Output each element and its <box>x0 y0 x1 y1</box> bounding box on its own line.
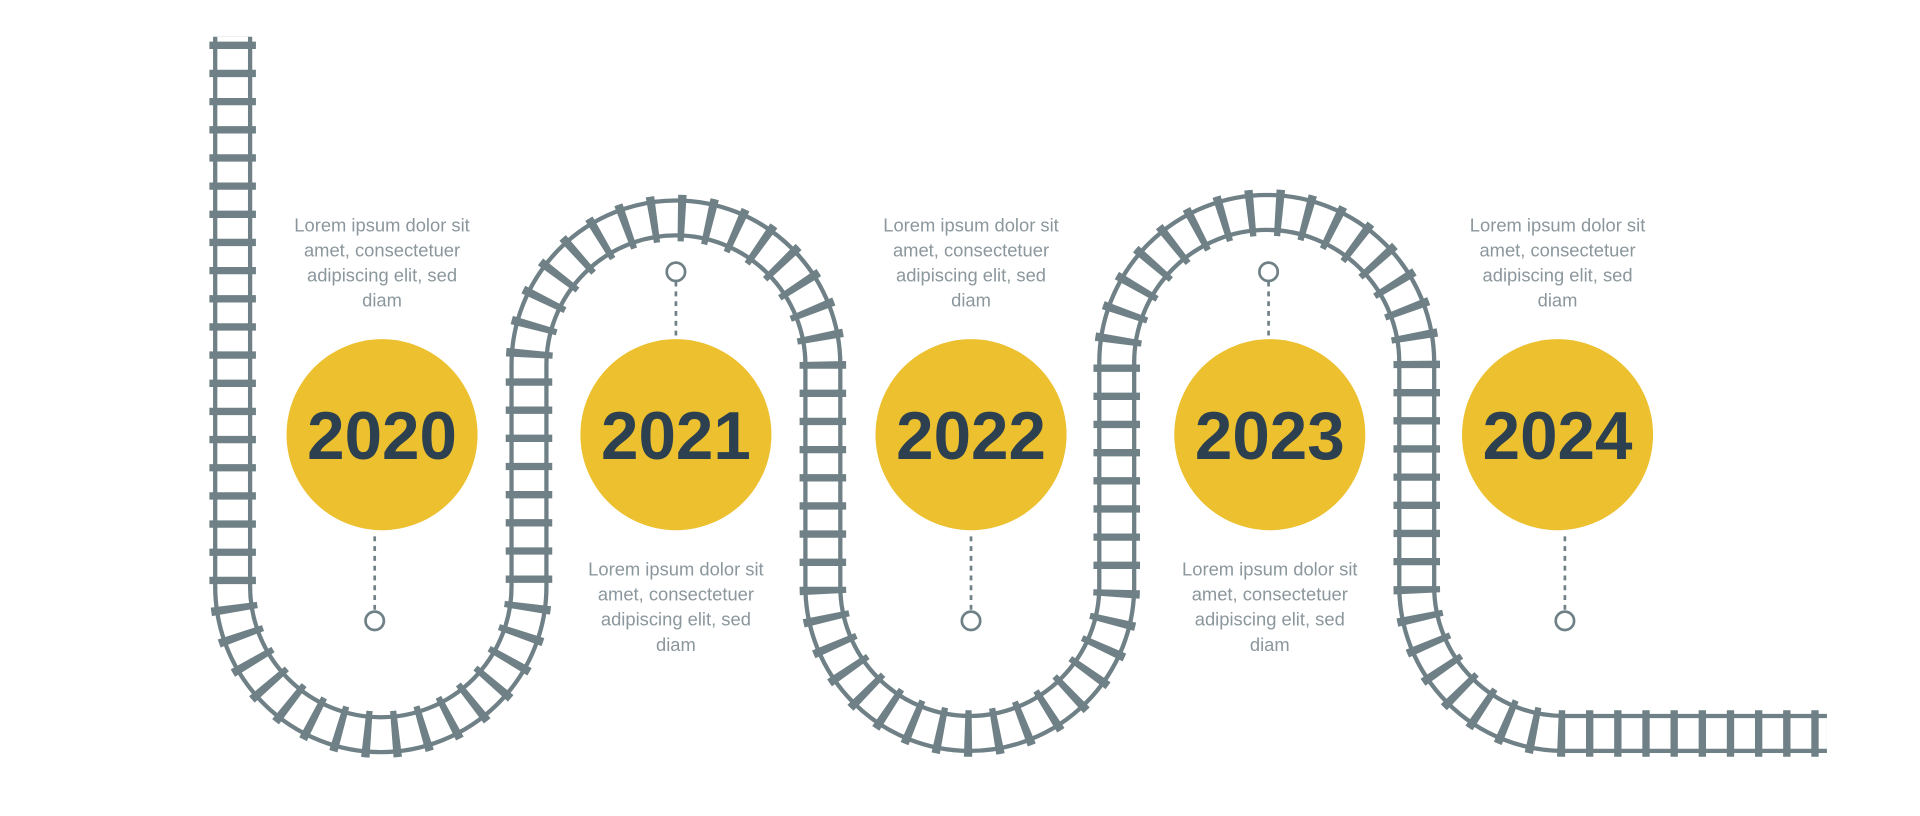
circle: 2021 <box>580 339 771 530</box>
text: 2024 description: diam <box>1538 290 1577 311</box>
text: 2021 description: adipiscing elit, sed <box>601 609 751 630</box>
circle: 2023 <box>1174 339 1365 530</box>
text: 2020 description: amet, consectetuer <box>304 240 460 261</box>
year: 2023: 2023 <box>1195 399 1345 474</box>
connector: 2020 <box>366 536 384 630</box>
milestone 2020 <box>287 214 478 630</box>
connector: 2021 <box>667 263 685 337</box>
year: 2021: 2021 <box>601 399 751 474</box>
year: 2020: 2020 <box>307 399 457 474</box>
text: 2020 description: Lorem ipsum dolor sit <box>294 214 470 235</box>
milestone 2024 <box>1462 214 1653 630</box>
circle: 2024 <box>1462 339 1653 530</box>
text: 2023 description: Lorem ipsum dolor sit <box>1182 559 1358 580</box>
railway track <box>233 37 1827 735</box>
text: 2023 description: adipiscing elit, sed <box>1195 609 1345 630</box>
connector: 2023 <box>1259 263 1278 337</box>
text: 2021 description: amet, consectetuer <box>598 584 754 605</box>
circle: 2020 <box>287 339 478 530</box>
text: 2021 description: Lorem ipsum dolor sit <box>588 559 764 580</box>
milestone 2023 <box>1174 263 1365 655</box>
text: 2024 description: adipiscing elit, sed <box>1483 265 1633 286</box>
text: 2020 description: diam <box>362 290 402 311</box>
text: 2020 description: adipiscing elit, sed <box>307 265 457 286</box>
year: 2022: 2022 <box>896 399 1046 474</box>
circle: 2022 <box>876 339 1067 530</box>
milestone 2021 <box>580 263 771 655</box>
connector: 2022 <box>962 536 980 630</box>
text: 2022 description: diam <box>951 290 991 311</box>
connector: 2024 <box>1556 536 1574 630</box>
text: 2023 description: diam <box>1250 634 1290 655</box>
text: 2024 description: Lorem ipsum dolor sit <box>1470 214 1645 235</box>
year: 2024: 2024 <box>1483 399 1633 474</box>
text: 2022 description: adipiscing elit, sed <box>896 265 1046 286</box>
milestone 2022 <box>876 214 1067 630</box>
text: 2021 description: diam <box>656 634 696 655</box>
text: 2024 description: amet, consectetuer <box>1479 240 1636 261</box>
text: 2022 description: Lorem ipsum dolor sit <box>883 214 1059 235</box>
text: 2022 description: amet, consectetuer <box>893 240 1049 261</box>
text: 2023 description: amet, consectetuer <box>1192 584 1348 605</box>
